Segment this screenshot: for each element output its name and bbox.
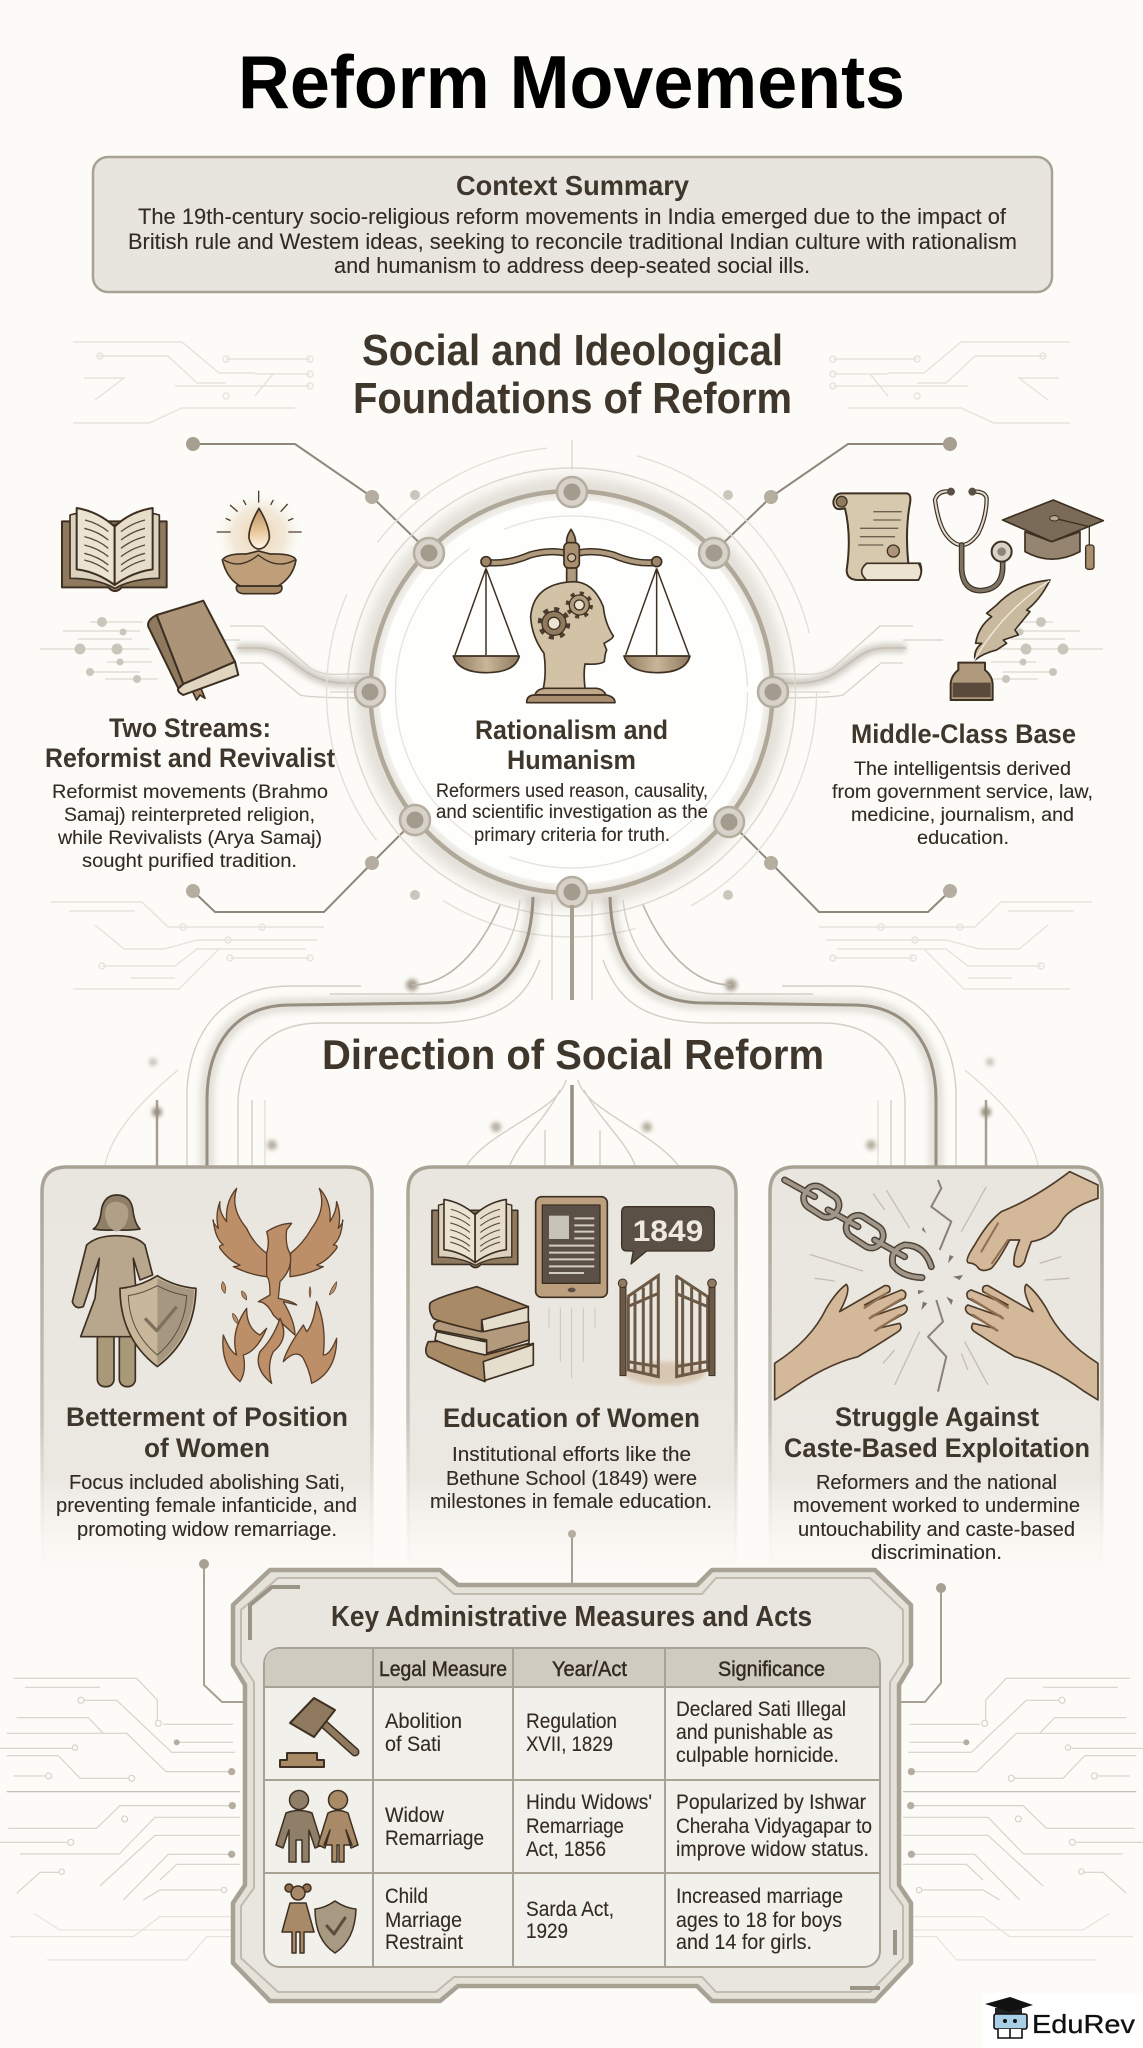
heading: two streams: Two Streams: xyxy=(109,713,271,743)
icon: open gate xyxy=(618,1276,716,1385)
text block: middle-class base xyxy=(832,719,1093,849)
icon: graduation cap mascot xyxy=(985,1997,1033,2038)
heading: education of women: Education of Women xyxy=(443,1403,700,1433)
heading: social and ideological foundations: Foundations of Reform xyxy=(353,374,792,423)
body: two streams: Samaj) reinterpreted religion, xyxy=(64,804,315,826)
body: two streams xyxy=(52,781,328,872)
row: widow remarriage: Remarriage xyxy=(526,1815,624,1838)
body: middle-class base: from government service, law, xyxy=(832,781,1093,803)
heading: social and ideological foundations: Social and Ideological xyxy=(362,326,783,375)
trunk lines: right branch to card xyxy=(603,897,1038,1167)
row: abolition of sati: Abolition xyxy=(385,1710,462,1733)
row: widow remarriage: Popularized by Ishwar xyxy=(676,1791,866,1814)
row: widow remarriage: Remarriage xyxy=(385,1827,484,1850)
table header row xyxy=(379,1658,825,1681)
hub: central ring xyxy=(326,440,830,937)
trunk lines: left branch to card xyxy=(105,897,540,1167)
gear small xyxy=(568,593,591,617)
row: widow remarriage: Act, 1856 xyxy=(526,1838,606,1861)
context summary body xyxy=(128,204,1017,278)
row: abolition of sati: culpable hornicide. xyxy=(676,1744,839,1767)
chain xyxy=(785,1180,931,1278)
heading: betterment of position of women: of Women xyxy=(144,1433,270,1463)
heading: betterment of position of women: Betterment of Position xyxy=(66,1402,348,1432)
row: child marriage restraint: 1929 xyxy=(526,1920,568,1943)
icon: open book xyxy=(62,508,167,591)
body: struggle against caste-based exploitation xyxy=(793,1472,1080,1564)
row: abolition of sati: of Sati xyxy=(385,1733,441,1756)
context summary body: The 19th-century socio-religious reform movements in India emerged due to the impact of xyxy=(138,204,1007,229)
row: abolition of sati: XVII, 1829 xyxy=(526,1733,613,1756)
body: struggle against caste-based exploitation: movement worked to undermine xyxy=(793,1495,1080,1517)
body: education of women: Institutional efforts like the xyxy=(452,1444,691,1466)
icon: oil lamp xyxy=(214,490,304,594)
row: child marriage restraint: Restraint xyxy=(385,1931,463,1954)
body: middle-class base: education. xyxy=(917,827,1009,849)
row: child marriage restraint: Marriage xyxy=(385,1909,462,1932)
connector lines: left side of hub xyxy=(40,437,430,912)
row: child marriage restraint: Increased marriage xyxy=(676,1885,843,1908)
circuit pattern: upper right xyxy=(819,342,1092,989)
connector lines: right side of hub xyxy=(713,437,1103,912)
heading: rationalism and humanism: Rationalism and xyxy=(475,715,668,745)
circuit pattern: lower left xyxy=(0,1678,240,1960)
hand lower left xyxy=(775,1284,907,1400)
row: child marriage restraint: and 14 for girls. xyxy=(676,1931,812,1954)
body: struggle against caste-based exploitation: untouchability and caste-based xyxy=(798,1519,1075,1541)
icon: 1849 speech bubble: 1849 xyxy=(633,1215,703,1248)
body: betterment of position of women xyxy=(56,1472,357,1541)
body: rationalism and humanism: and scientific investigation as the xyxy=(436,802,708,823)
row: child marriage restraint: ages to 18 for boys xyxy=(676,1909,842,1932)
body: two streams: Reformist movements (Brahmo xyxy=(52,781,328,803)
body: middle-class base xyxy=(832,758,1093,849)
hub nodes xyxy=(355,477,788,907)
row: abolition of sati: Regulation xyxy=(526,1710,617,1733)
logo: EduRev xyxy=(982,1993,1143,2048)
icon: child with shield xyxy=(282,1884,356,1953)
heading: two streams: Reformist and Revivalist xyxy=(45,743,335,773)
panel: context summary xyxy=(93,157,1052,292)
body: struggle against caste-based exploitation: discrimination. xyxy=(871,1542,1002,1564)
heading: struggle against caste-based exploitation: Caste-Based Exploitation xyxy=(784,1433,1090,1463)
heading: betterment of position of women xyxy=(66,1402,348,1463)
icon: breaking chain and reaching hands xyxy=(775,1172,1098,1400)
hand lower right xyxy=(965,1284,1098,1400)
row: child marriage restraint: Sarda Act, xyxy=(526,1898,614,1921)
table frame xyxy=(233,1570,911,2001)
row: abolition of sati: and punishable as xyxy=(676,1721,833,1744)
body: rationalism and humanism: Reformers used reason, causality, xyxy=(436,781,708,802)
icon: graduation cap xyxy=(1003,500,1103,569)
body: two streams: while Revivalists (Arya Samaj) xyxy=(57,827,322,849)
icon: closed book xyxy=(148,601,238,700)
icon: scales and head xyxy=(453,529,690,703)
text block: two streams xyxy=(45,713,335,872)
body: education of women: Bethune School (1849) were xyxy=(446,1468,697,1490)
row: widow remarriage: Cheraha Vidyagapar to xyxy=(676,1815,872,1838)
row: child marriage restraint xyxy=(385,1885,843,1954)
icon: stack of books xyxy=(426,1287,533,1382)
heading: direction of social reform: Direction of Social Reform xyxy=(322,1031,824,1078)
row: child marriage restraint: Child xyxy=(385,1885,428,1908)
body: two streams: sought purified tradition. xyxy=(82,850,297,872)
panel: key administrative measures and acts xyxy=(233,1570,911,2001)
icon: couple holding hands xyxy=(276,1790,358,1862)
body: betterment of position of women: preventing female infanticide, and xyxy=(56,1495,357,1517)
icon: phoenix rising from flames xyxy=(213,1188,343,1383)
heading: struggle against caste-based exploitation: Struggle Against xyxy=(835,1402,1039,1432)
table title: Key Administrative Measures and Acts xyxy=(331,1601,812,1633)
context summary heading: Context Summary xyxy=(456,170,689,201)
hand upper right xyxy=(967,1172,1098,1270)
body: education of women: milestones in female education. xyxy=(430,1491,712,1513)
context summary body: and humanism to address deep-seated social ills. xyxy=(334,253,810,278)
icon: woman with shield xyxy=(72,1195,196,1387)
text block: rationalism and humanism xyxy=(436,715,708,846)
body: rationalism and humanism: primary criteria for truth. xyxy=(474,825,670,846)
body: betterment of position of women: Focus included abolishing Sati, xyxy=(69,1472,345,1494)
row: abolition of sati: Declared Sati Illegal xyxy=(676,1698,846,1721)
table header row: Legal Measure xyxy=(379,1658,507,1681)
heading: middle-class base: Middle-Class Base xyxy=(851,719,1076,749)
trunk lines: centre branch to card xyxy=(467,900,678,1167)
body: middle-class base: The intelligentsis derived xyxy=(854,758,1071,780)
icon: 1849 speech bubble xyxy=(622,1207,714,1264)
panel: betterment of position of women xyxy=(42,1167,372,1600)
icon: tablet xyxy=(536,1197,607,1378)
body: betterment of position of women: promoting widow remarriage. xyxy=(77,1519,337,1541)
table xyxy=(264,1648,880,1967)
table header row: Year/Act xyxy=(552,1658,627,1681)
panel: struggle against caste-based exploitation xyxy=(770,1167,1102,1600)
heading: two streams xyxy=(45,713,335,773)
icon: open book small xyxy=(432,1199,518,1268)
row: widow remarriage: improve widow status. xyxy=(676,1838,869,1861)
circuit pattern: lower right xyxy=(903,1678,1143,1960)
title: Reform Movements xyxy=(238,40,905,124)
heading: rationalism and humanism: Humanism xyxy=(507,745,636,775)
connectors: cards to table xyxy=(199,1530,946,1702)
body: middle-class base: medicine, journalism, and xyxy=(851,804,1074,826)
row: widow remarriage: Widow xyxy=(385,1804,445,1827)
logo wordmark: EduRev xyxy=(1032,2009,1135,2039)
icon: stethoscope xyxy=(935,488,1012,591)
circuit pattern: upper left xyxy=(51,342,324,989)
gear large xyxy=(540,609,568,637)
heading: struggle against caste-based exploitation xyxy=(784,1402,1090,1463)
heading: rationalism and humanism xyxy=(475,715,668,775)
icon: feather and ink bottle xyxy=(951,580,1050,700)
row: abolition of sati xyxy=(385,1698,846,1767)
row: widow remarriage xyxy=(385,1791,872,1861)
table header row: Significance xyxy=(718,1658,825,1681)
icon: scroll xyxy=(833,493,921,580)
body: rationalism and humanism xyxy=(436,781,708,846)
panel: education of women xyxy=(408,1167,736,1600)
icon: gavel xyxy=(280,1698,355,1767)
row: widow remarriage: Hindu Widows' xyxy=(526,1791,652,1814)
heading: social and ideological foundations xyxy=(353,326,792,423)
context summary body: British rule and Westem ideas, seeking to reconcile traditional Indian culture with rationalism xyxy=(128,229,1017,254)
body: struggle against caste-based exploitation: Reformers and the national xyxy=(816,1472,1057,1494)
body: education of women xyxy=(430,1444,712,1513)
